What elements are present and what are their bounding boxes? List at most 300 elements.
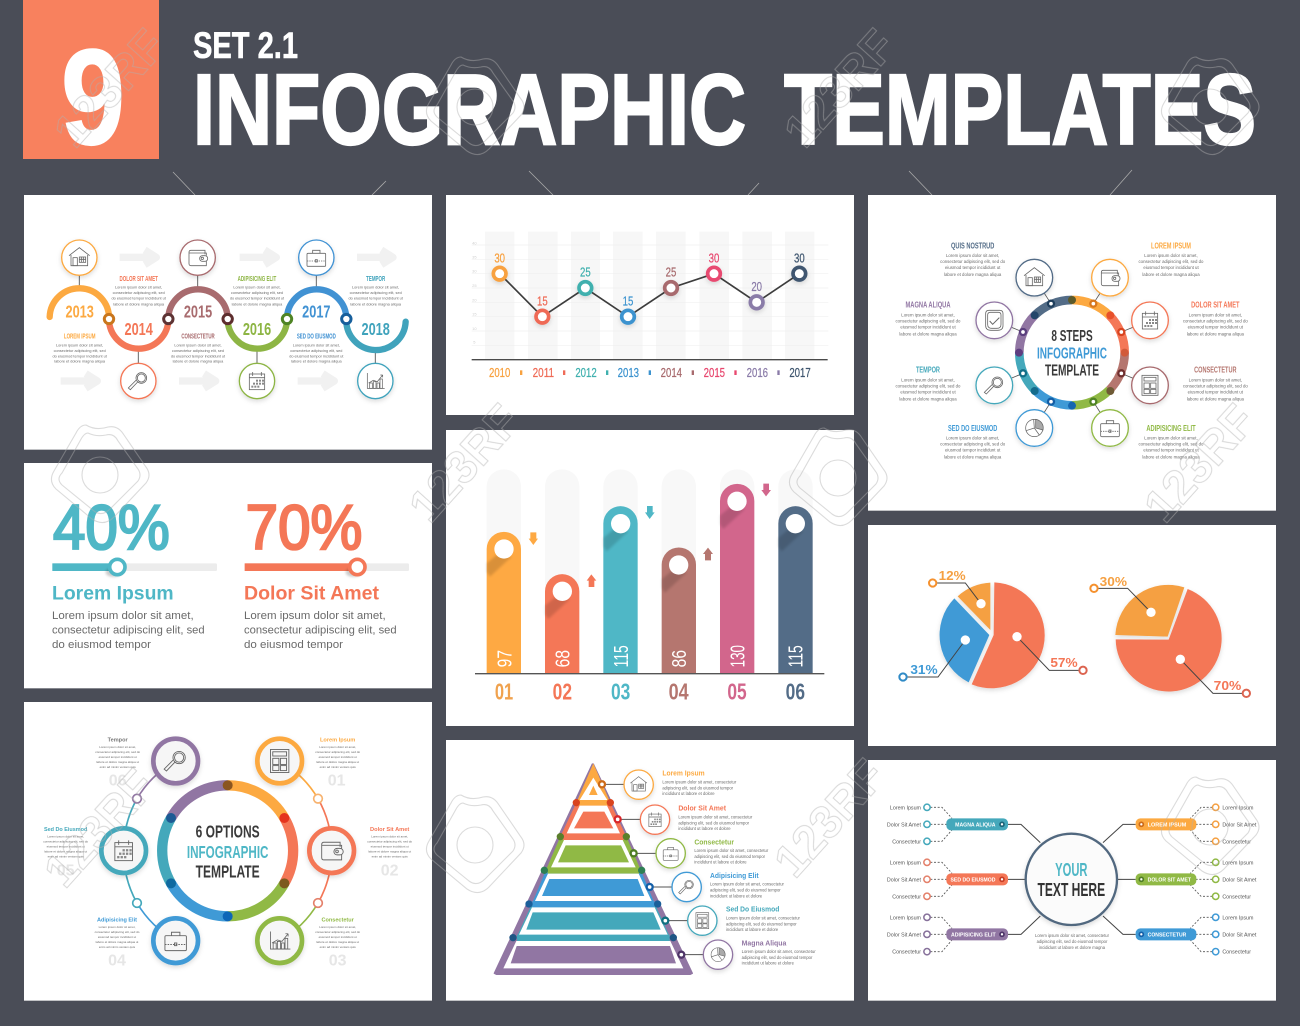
ring joints <box>166 780 289 921</box>
text: option 05: Lorem ipsum dolor sit amet, <box>47 835 84 839</box>
text: Sed Do Eiusmod: SED DO EIUSMOD <box>948 423 997 433</box>
year labels: 2012 <box>575 366 597 380</box>
text: option 06: Tempor <box>108 737 128 743</box>
text: Adipisicing Elit: do eiusmod tempor incididunt ut <box>230 297 285 301</box>
text: Consectetur <box>694 839 769 865</box>
bar 06 <box>778 506 813 673</box>
right leaf labels: Dolor Sit Amet <box>1222 877 1257 883</box>
leaf nodes <box>924 804 1219 955</box>
icon: shield check <box>976 302 1013 339</box>
text: Lorem Ipsum: LOREM IPSUM <box>64 334 96 341</box>
chart grid: 5 <box>473 340 476 345</box>
text: option 03: enim ad minim veniam quis <box>320 945 356 949</box>
text: Lorem Ipsum: consectetur adipiscing elit, sed do <box>1139 259 1204 264</box>
icon: calendar <box>101 828 146 873</box>
text: Tempor: eiusmod tempor incididunt ut <box>900 389 956 394</box>
text: option 06: consectetur adipiscing elit, sed do <box>95 750 140 754</box>
pie 2 <box>1115 585 1222 691</box>
chart grid <box>472 232 828 359</box>
chart grid: 25 <box>472 283 477 288</box>
text: Adipisicing Elit: eiusmod tempor incididunt ut <box>1143 448 1199 453</box>
bar 02: 68 <box>552 650 575 667</box>
text: Tempor: do eiusmod tempor incididunt ut <box>349 297 404 301</box>
text: Sed Do Eiusmod: SED DO EIUSMOD <box>297 334 336 341</box>
pill: Magna Aliqua <box>946 818 1008 830</box>
text: Adipisicing Elit: consectetur adipiscing elit, sed <box>231 291 283 295</box>
text: option 04: consectetur adipiscing elit, sed do <box>95 930 140 934</box>
text: Dolor Sit Amet: adipiscing elit, sed do eiusmod tempor <box>678 820 750 825</box>
text: Adipisicing Elit: adipiscing elit, sed do eiusmod tempor <box>710 888 781 893</box>
value labels: 20 <box>751 280 762 294</box>
year labels: 2016 <box>747 366 768 380</box>
watermarks: 123RF <box>774 19 905 157</box>
text: option 01 <box>315 737 360 790</box>
pill: Dolor Sit Amet <box>1136 873 1196 885</box>
right leaf labels: Lorem Ipsum <box>1222 805 1254 811</box>
callout: 12%: 12% <box>939 569 966 583</box>
right leaf labels: Lorem Ipsum <box>1222 915 1254 921</box>
icon: magnifier <box>672 872 701 902</box>
panel: bar chart <box>446 430 854 726</box>
text: Dolor Sit Amet: do eiusmod tempor incididunt ut <box>112 297 167 301</box>
text: Lorem Ipsum: Lorem ipsum dolor sit amet, <box>56 343 103 347</box>
text: Sed Do Eiusmod: consectetur adipiscing elit, sed do <box>940 442 1006 447</box>
connector lines <box>79 275 375 363</box>
text: Consectetur: eiusmod tempor incididunt ut <box>1188 389 1244 394</box>
text: Lorem Ipsum: eiusmod tempor incididunt ut <box>1143 265 1199 270</box>
year labels: 2016 <box>243 319 271 339</box>
chart grid: 10 <box>472 326 477 331</box>
text: Tempor: TEMPOR <box>916 365 940 375</box>
text: Quis Nostrud: consectetur adipiscing elit, sed do <box>940 259 1006 264</box>
value labels: 30 <box>794 251 805 265</box>
text: Sed Do Eiusmod <box>940 423 1006 460</box>
text: option 03: Lorem ipsum dolor sit amet, <box>319 925 356 929</box>
icon: pie chart <box>703 940 733 969</box>
pill: Lorem Ipsum: LOREM IPSUM <box>1148 822 1187 828</box>
icon: magnifier <box>121 363 156 399</box>
bar labels <box>495 678 805 704</box>
center title: INFOGRAPHIC <box>1037 346 1107 363</box>
stat: 40%: do eiusmod tempor <box>52 639 151 651</box>
text: option 02: 02 <box>381 863 399 880</box>
text: Adipisicing Elit <box>230 276 285 306</box>
orbit nodes <box>133 794 322 907</box>
text: Tempor: labore et dolore magna aliqua <box>350 302 402 306</box>
text: option 01: enim ad minim veniam quis <box>320 765 356 769</box>
callout: 57% <box>1012 632 1087 674</box>
text: Dolor Sit Amet: consectetur adipiscing elit, sed do <box>1183 318 1248 323</box>
icon: house <box>624 770 653 799</box>
bar tracks <box>487 469 813 673</box>
text: Lorem Ipsum: LOREM IPSUM <box>1151 240 1191 250</box>
text: Adipisicing Elit: labore et dolore magna aliqua <box>232 302 283 306</box>
text: Magna Aliqua: MAGNA ALIQUA <box>905 300 951 310</box>
text: option 01: eiusmod tempor incididunt ut <box>319 755 357 759</box>
text: Consectetur: labore et dolore magna aliqua <box>1187 396 1245 401</box>
text: Sed Do Eiusmod <box>289 334 344 364</box>
text: Magna Aliqua: incididunt ut labore et dolore <box>742 961 795 966</box>
watermarks: 123RF <box>44 19 175 157</box>
icon: magnifier <box>153 739 198 783</box>
center title <box>1037 328 1107 380</box>
ring segments <box>1019 300 1125 405</box>
pill: Dolor Sit Amet: DOLOR SIT AMET <box>1148 877 1191 883</box>
text: Sed Do Eiusmod <box>726 907 801 932</box>
text: Dolor Sit Amet: DOLOR SIT AMET <box>119 276 158 283</box>
text: Sed Do Eiusmod: labore et dolore magna aliqua <box>944 455 1002 460</box>
text: Tempor: consectetur adipiscing elit, sed do <box>896 383 961 388</box>
text: option 05: 05 <box>57 863 75 880</box>
pill: Adipisicing Elit: ADIPISICING ELIT <box>951 932 996 938</box>
text: Lorem Ipsum: adipiscing elit, sed do eiusmod tempor <box>662 785 734 790</box>
center caption: incididunt ut labore et dolore magna <box>1039 945 1106 950</box>
chart grid: 20 <box>472 297 477 302</box>
text: option 06: eiusmod tempor incididunt ut <box>99 755 137 759</box>
year labels: 2010 <box>489 366 510 380</box>
x axis <box>472 358 828 362</box>
text: option 04: Adipisicing Elit <box>97 917 137 923</box>
bar labels: 02 <box>553 678 572 704</box>
text: Quis Nostrud: eiusmod tempor incididunt ut <box>945 265 1001 270</box>
pie 1 <box>940 582 1045 688</box>
text: Tempor: consectetur adipiscing elit, sed <box>350 291 402 295</box>
text: Magna Aliqua: Lorem ipsum dolor sit amet, <box>901 312 955 317</box>
text: option 02 <box>367 827 412 880</box>
bar 03: 115 <box>610 645 633 667</box>
baseline <box>475 672 824 676</box>
text: option 02: Lorem ipsum dolor sit amet, <box>371 835 408 839</box>
value labels: 15 <box>537 294 548 308</box>
text: Lorem Ipsum: consectetur adipiscing elit, sed <box>54 349 106 353</box>
text: option 02: consectetur adipiscing elit, sed do <box>367 840 412 844</box>
text: Lorem Ipsum: Lorem Ipsum <box>662 771 705 778</box>
text: Dolor Sit Amet: Dolor Sit Amet <box>678 806 727 813</box>
connectors <box>994 278 1150 428</box>
bar labels: 05 <box>727 678 747 704</box>
text: Adipisicing Elit: consectetur adipiscing elit, sed do <box>1139 442 1204 447</box>
text: Tempor: labore et dolore magna aliqua <box>899 396 957 401</box>
text: Tempor: Lorem ipsum dolor sit amet, <box>901 377 955 382</box>
text: Consectetur: labore et dolore magna aliqua <box>173 360 224 364</box>
right leaf labels: Lorem Ipsum <box>1222 860 1254 866</box>
center caption: Lorem ipsum dolor sit amet, consectetur <box>1035 933 1110 938</box>
data markers <box>493 267 806 323</box>
text: option 01: consectetur adipiscing elit, sed do <box>315 750 360 754</box>
text: Sed Do Eiusmod: Lorem ipsum dolor sit amet, <box>293 343 340 347</box>
icon: calendar <box>640 805 670 834</box>
text: Adipisicing Elit: Adipisicing Elit <box>710 873 759 880</box>
text: option 04: Lorem ipsum dolor sit amet, <box>99 925 136 929</box>
value labels: 25 <box>580 266 591 280</box>
right leaf labels: Consectetur <box>1222 894 1251 900</box>
stat: 70%: Lorem ipsum dolor sit amet, <box>244 610 386 622</box>
text: Adipisicing Elit: incididunt ut labore et dolore <box>710 893 763 898</box>
stat: 40%: Lorem Ipsum <box>52 584 174 605</box>
text: Lorem Ipsum: labore et dolore magna aliqua <box>1142 272 1200 277</box>
text: option 05: Sed Do Eiusmod <box>44 827 87 833</box>
text: option 03 <box>315 917 360 969</box>
year labels: 2014 <box>124 319 153 339</box>
stat: 70%: consectetur adipiscing elit, sed <box>244 625 397 637</box>
text: Sed Do Eiusmod: adipiscing elit, sed do eiusmod tempor <box>726 921 797 926</box>
text: option 01: 01 <box>328 773 346 790</box>
icon: calculator <box>688 906 717 935</box>
chart grid: 35 <box>472 255 477 260</box>
panel: pie charts <box>868 525 1276 746</box>
icon: house <box>1016 259 1053 296</box>
pyramid layers <box>494 763 692 974</box>
icon: wallet <box>180 240 215 275</box>
bar 02 <box>545 574 579 673</box>
icon: chart <box>358 363 393 399</box>
text: option 06: enim ad minim veniam quis <box>100 765 136 769</box>
text: Quis Nostrud: Lorem ipsum dolor sit amet, <box>946 253 999 258</box>
text: Dolor Sit Amet <box>1183 300 1248 336</box>
panel: mind map <box>868 760 1276 1001</box>
callout: 12% <box>929 569 986 608</box>
text: Adipisicing Elit: Lorem ipsum dolor sit amet, <box>1144 436 1198 441</box>
callout: 30% <box>1090 575 1156 617</box>
center circle: YOUR <box>1055 859 1088 880</box>
left leaf labels <box>887 805 922 956</box>
orbit connectors <box>124 761 332 941</box>
text: option 05: labore et dolore magna aliqua ut <box>44 850 87 854</box>
text: Sed Do Eiusmod: eiusmod tempor incididunt ut <box>945 448 1001 453</box>
text: Adipisicing Elit: Lorem ipsum dolor sit amet, <box>233 285 281 289</box>
text: Dolor Sit Amet <box>678 806 753 831</box>
text: Sed Do Eiusmod: Lorem ipsum dolor sit amet, consectetur <box>726 915 801 920</box>
text: Lorem Ipsum: Lorem ipsum dolor sit amet, <box>1144 253 1198 258</box>
text: option 06: Lorem ipsum dolor sit amet, <box>99 745 136 749</box>
pyramid nodes <box>599 781 684 958</box>
stat: 40%: consectetur adipiscing elit, sed <box>52 625 205 637</box>
watermarks: 123RF <box>399 394 530 532</box>
text: Lorem Ipsum <box>662 771 737 796</box>
icon: calendar <box>239 363 275 399</box>
text: Tempor <box>896 365 961 401</box>
text: option 05: eiusmod tempor incididunt ut <box>47 845 85 849</box>
text: Consectetur: CONSECTETUR <box>181 334 215 341</box>
panel: line chart <box>446 195 854 415</box>
text: Consectetur: incididunt ut labore et dolore <box>694 860 747 865</box>
bar labels: 04 <box>669 678 689 704</box>
text: Lorem Ipsum: incididunt ut labore et dolore <box>662 791 715 796</box>
text: Lorem Ipsum: do eiusmod tempor incididunt ut <box>53 354 108 358</box>
panel: timeline 2013-2018 <box>24 195 432 450</box>
text: option 05: enim ad minim veniam quis <box>48 855 84 859</box>
text: Tempor: TEMPOR <box>366 276 385 283</box>
right leaf labels: Consectetur <box>1222 839 1251 845</box>
wave line <box>50 288 406 350</box>
icon: briefcase <box>299 240 334 275</box>
left leaf labels: Consectetur <box>892 894 921 900</box>
icon: briefcase <box>153 918 198 963</box>
text: Magna Aliqua <box>896 300 961 336</box>
year labels: 2015 <box>704 366 725 380</box>
left leaf labels: Lorem Ipsum <box>890 805 922 811</box>
text: option 02: enim ad minim veniam quis <box>372 855 408 859</box>
text: Consectetur: consectetur adipiscing elit, sed <box>172 349 224 353</box>
text: Dolor Sit Amet: consectetur adipiscing elit, sed <box>113 291 165 295</box>
text: option 01: labore et dolore magna aliqua ut <box>316 760 359 764</box>
value labels <box>494 251 805 308</box>
text: Adipisicing Elit <box>1139 423 1204 460</box>
value labels: 30 <box>494 251 505 265</box>
right leaf labels: Dolor Sit Amet <box>1222 822 1257 828</box>
text: Sed Do Eiusmod: labore et dolore magna aliqua <box>291 360 343 364</box>
text: option 02: eiusmod tempor incididunt ut <box>371 845 409 849</box>
text: Consectetur: Lorem ipsum dolor sit amet, <box>174 343 222 347</box>
panel: 6 options infographic <box>24 702 432 1001</box>
icon: chart <box>257 918 302 963</box>
value labels: 30 <box>709 251 719 265</box>
bar 06: 115 <box>785 645 808 667</box>
year labels: 2018 <box>361 319 390 339</box>
text: Quis Nostrud: labore et dolore magna aliqua <box>944 272 1002 277</box>
text: Adipisicing Elit: Lorem ipsum dolor sit amet, consectetur <box>710 882 785 887</box>
text: Magna Aliqua: labore et dolore magna aliqua <box>899 331 957 336</box>
text: Consectetur <box>171 334 226 364</box>
text: Dolor Sit Amet: labore et dolore magna aliqua <box>1187 331 1245 336</box>
badge: number 9 <box>23 0 159 173</box>
trend arrows <box>529 484 771 587</box>
chart grid: 30 <box>472 269 477 274</box>
chart grid: 40 <box>472 240 477 245</box>
text: option 05: consectetur adipiscing elit, sed do <box>43 840 88 844</box>
background arrows <box>61 250 393 388</box>
bar 05 <box>720 484 754 673</box>
left leaf labels: Dolor Sit Amet <box>887 877 922 883</box>
text: Consectetur: adipiscing elit, sed do eiusmod tempor <box>694 854 766 859</box>
wave nodes <box>104 314 351 324</box>
watermarks: 123RF <box>1134 394 1265 532</box>
text: Tempor: Lorem ipsum dolor sit amet, <box>352 285 399 289</box>
text: Quis Nostrud <box>940 240 1006 277</box>
data line <box>500 274 799 317</box>
text: option 05 <box>43 827 88 880</box>
pill: Sed Do Eiusmod: SED DO EIUSMOD <box>950 877 995 883</box>
stat: 70%: 70% <box>246 493 362 563</box>
year labels: 2014 <box>661 366 682 380</box>
bar labels: 01 <box>495 678 513 704</box>
ring joints <box>1015 296 1129 410</box>
text: Quis Nostrud: QUIS NOSTRUD <box>951 240 994 250</box>
center title <box>187 821 268 882</box>
pill: Adipisicing Elit <box>946 928 1008 940</box>
dashed leaf lines <box>930 807 1212 952</box>
pill: Sed Do Eiusmod <box>946 873 1008 885</box>
badge: number 9: 9 <box>61 21 125 173</box>
text: Consectetur: consectetur adipiscing elit, sed do <box>1183 383 1248 388</box>
text: Lorem Ipsum <box>53 334 108 364</box>
text: option 03: 03 <box>329 952 347 969</box>
callout: 31%: 31% <box>910 663 938 677</box>
title <box>193 54 1256 166</box>
center title: 6 OPTIONS <box>196 821 260 841</box>
text: Magna Aliqua: consectetur adipiscing elit, sed do <box>896 318 961 323</box>
text: Dolor Sit Amet: Lorem ipsum dolor sit amet, <box>1189 312 1242 317</box>
text: Lorem Ipsum: Lorem ipsum dolor sit amet, consectetur <box>662 779 737 784</box>
stat: 70%: Dolor Sit Amet <box>244 584 380 605</box>
bar 05: 130 <box>726 645 749 667</box>
bar 01 <box>487 532 521 673</box>
subtitle: SET 2.1 <box>193 25 298 66</box>
text: Dolor Sit Amet: labore et dolore magna aliqua <box>113 302 165 306</box>
icon: calendar <box>1132 302 1168 339</box>
text: Dolor Sit Amet: Lorem ipsum dolor sit amet, consectetur <box>678 814 753 819</box>
ring nodes <box>1020 301 1124 405</box>
text: Magna Aliqua <box>742 940 816 966</box>
text: option 04 <box>95 917 140 969</box>
year labels: 2013 <box>65 302 94 322</box>
left leaf labels: Consectetur <box>892 950 921 956</box>
right leaf labels: Consectetur <box>1222 950 1251 956</box>
text: Consectetur: do eiusmod tempor incididunt ut <box>171 354 226 358</box>
text: Consectetur: Consectetur <box>694 839 734 846</box>
text: Sed Do Eiusmod: do eiusmod tempor incididunt ut <box>289 354 344 358</box>
text: Adipisicing Elit: ADIPISICING ELIT <box>1146 423 1196 433</box>
center title: INFOGRAPHIC <box>187 842 268 862</box>
text: Consectetur: Lorem ipsum dolor sit amet, <box>1189 377 1242 382</box>
watermarks: 123RF <box>764 749 895 887</box>
value labels: 15 <box>623 294 633 308</box>
text: option 04: 04 <box>108 952 126 969</box>
year labels: 2015 <box>184 302 212 322</box>
callout: 57%: 57% <box>1050 656 1078 670</box>
bar 04: 86 <box>668 650 691 667</box>
text: Consectetur: CONSECTETUR <box>1194 365 1237 375</box>
text: option 06: 06 <box>109 773 127 790</box>
text: Dolor Sit Amet: eiusmod tempor incididunt ut <box>1188 324 1244 329</box>
watermarks: 123RF <box>34 759 165 897</box>
left leaf labels: Consectetur <box>892 839 921 845</box>
text: option 06 <box>95 737 140 790</box>
text: Dolor Sit Amet <box>112 276 167 306</box>
text: Dolor Sit Amet: Lorem ipsum dolor sit amet, <box>115 285 162 289</box>
stat: 40%: Lorem ipsum dolor sit amet, <box>52 610 194 622</box>
text: option 01: Lorem Ipsum <box>320 737 356 743</box>
year labels: 2013 <box>618 366 639 380</box>
bar 01: 97 <box>493 650 516 667</box>
text: Magna Aliqua: Lorem ipsum dolor sit amet, consectetur <box>742 949 816 954</box>
year labels: 2017 <box>302 302 330 322</box>
text: option 03: Consectetur <box>321 917 354 923</box>
bar labels: 06 <box>786 678 805 704</box>
text: Dolor Sit Amet: DOLOR SIT AMET <box>1191 300 1240 310</box>
text: Magna Aliqua: adipiscing elit, sed do eiusmod tempor <box>742 955 813 960</box>
text: Magna Aliqua: Magna Aliqua <box>742 940 786 947</box>
center title: TEMPLATE <box>1045 363 1099 380</box>
stat: 70%: do eiusmod tempor <box>244 639 343 651</box>
center circle: TEXT HERE <box>1037 879 1105 900</box>
pill: Consectetur <box>1136 928 1196 940</box>
year labels <box>65 302 390 339</box>
text: Consectetur <box>1183 365 1248 401</box>
left leaf labels: Lorem Ipsum <box>890 860 922 866</box>
text: Lorem Ipsum <box>1139 240 1204 277</box>
text: Adipisicing Elit: labore et dolore magna aliqua <box>1142 455 1200 460</box>
bar labels: 03 <box>611 678 630 704</box>
value labels: 25 <box>666 266 676 280</box>
text: Sed Do Eiusmod: consectetur adipiscing elit, sed <box>290 349 342 353</box>
right leaf labels: Dolor Sit Amet <box>1222 932 1257 938</box>
text: Adipisicing Elit <box>710 873 785 898</box>
icon: magnifier <box>976 367 1013 404</box>
pill: Lorem Ipsum <box>1136 818 1196 830</box>
text: option 03: consectetur adipiscing elit, sed do <box>315 930 360 934</box>
icon: house <box>62 240 97 275</box>
